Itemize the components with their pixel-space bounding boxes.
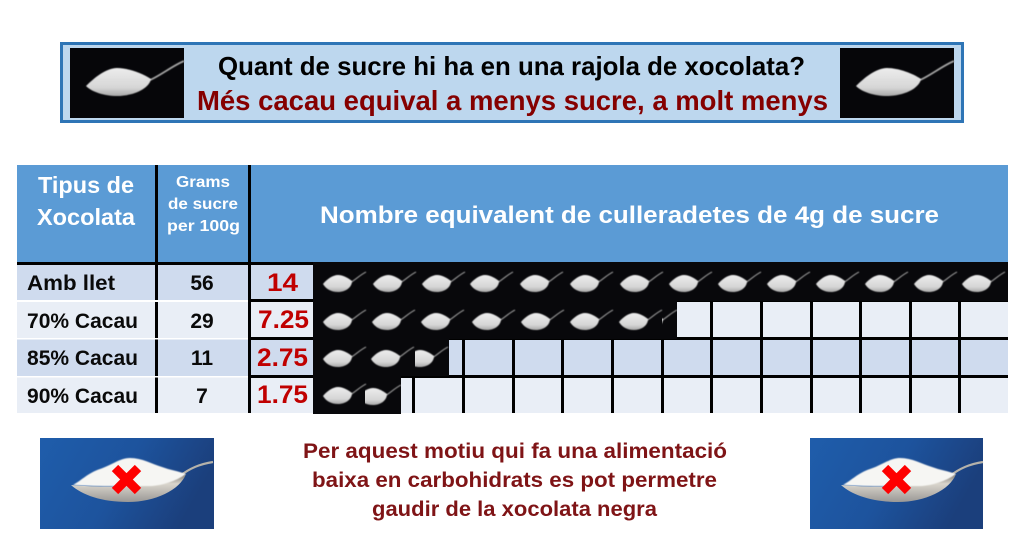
title subheading: Més cacau equival a menys sucre, a molt menys bbox=[197, 85, 828, 116]
conclusion text: gaudir de la xocolata negra bbox=[372, 498, 657, 521]
teaspoon count values: 2.75 bbox=[257, 344, 308, 372]
grams of sugar values: 29 bbox=[190, 310, 214, 333]
header: grams of sugar: Grams bbox=[176, 174, 230, 191]
spoons row: milk chocolate, 14 bbox=[313, 262, 1008, 301]
chocolate type labels: Amb llet bbox=[27, 272, 115, 295]
header: chocolate type bbox=[37, 172, 135, 230]
spoons row: 70% cacao, 7.25 bbox=[313, 301, 677, 339]
conclusion text: baixa en carbohidrats es pot permetre bbox=[312, 469, 717, 492]
grams of sugar values: 56 bbox=[190, 272, 214, 295]
icon: crossed out sugar spoon, left bbox=[40, 438, 214, 529]
spoons row: 90% cacao, 1.75 bbox=[313, 376, 401, 414]
header: grams of sugar: per 100g bbox=[167, 218, 240, 235]
row backgrounds bbox=[17, 265, 1008, 413]
table header row bbox=[17, 165, 1008, 262]
conclusion text bbox=[303, 440, 727, 521]
table bbox=[17, 165, 1008, 414]
title banner bbox=[62, 44, 962, 122]
spoons row: 85% cacao, 2.75 bbox=[313, 339, 449, 376]
chocolate type labels bbox=[27, 272, 138, 408]
grams of sugar values: 11 bbox=[191, 347, 213, 370]
teaspoon count values: 14 bbox=[267, 269, 298, 297]
header: chocolate type: Tipus de bbox=[38, 172, 134, 198]
title question: Quant de sucre hi ha en una rajola de xocolata? bbox=[218, 51, 805, 81]
chocolate type labels: 90% Cacau bbox=[27, 385, 138, 408]
header: grams of sugar bbox=[167, 174, 240, 235]
teaspoon count values: 7.25 bbox=[258, 306, 309, 334]
teaspoon count values bbox=[257, 269, 309, 409]
icon: left sugar spoon bbox=[70, 48, 184, 118]
conclusion text: Per aquest motiu qui fa una alimentació bbox=[303, 440, 727, 463]
header: grams of sugar: de sucre bbox=[168, 196, 238, 213]
header: teaspoon count: Nombre equivalent de culleradetes de 4g de sucre bbox=[320, 202, 939, 229]
chocolate type labels: 85% Cacau bbox=[27, 347, 138, 370]
header: chocolate type: Xocolata bbox=[37, 204, 135, 230]
icon: right sugar spoon bbox=[840, 48, 954, 118]
grams of sugar values bbox=[190, 272, 214, 408]
icon: crossed out sugar spoon, right bbox=[810, 438, 983, 529]
teaspoon count values: 1.75 bbox=[257, 381, 308, 409]
grams of sugar values: 7 bbox=[196, 385, 208, 408]
chocolate type labels: 70% Cacau bbox=[27, 310, 138, 333]
table grid lines bbox=[17, 165, 1008, 413]
